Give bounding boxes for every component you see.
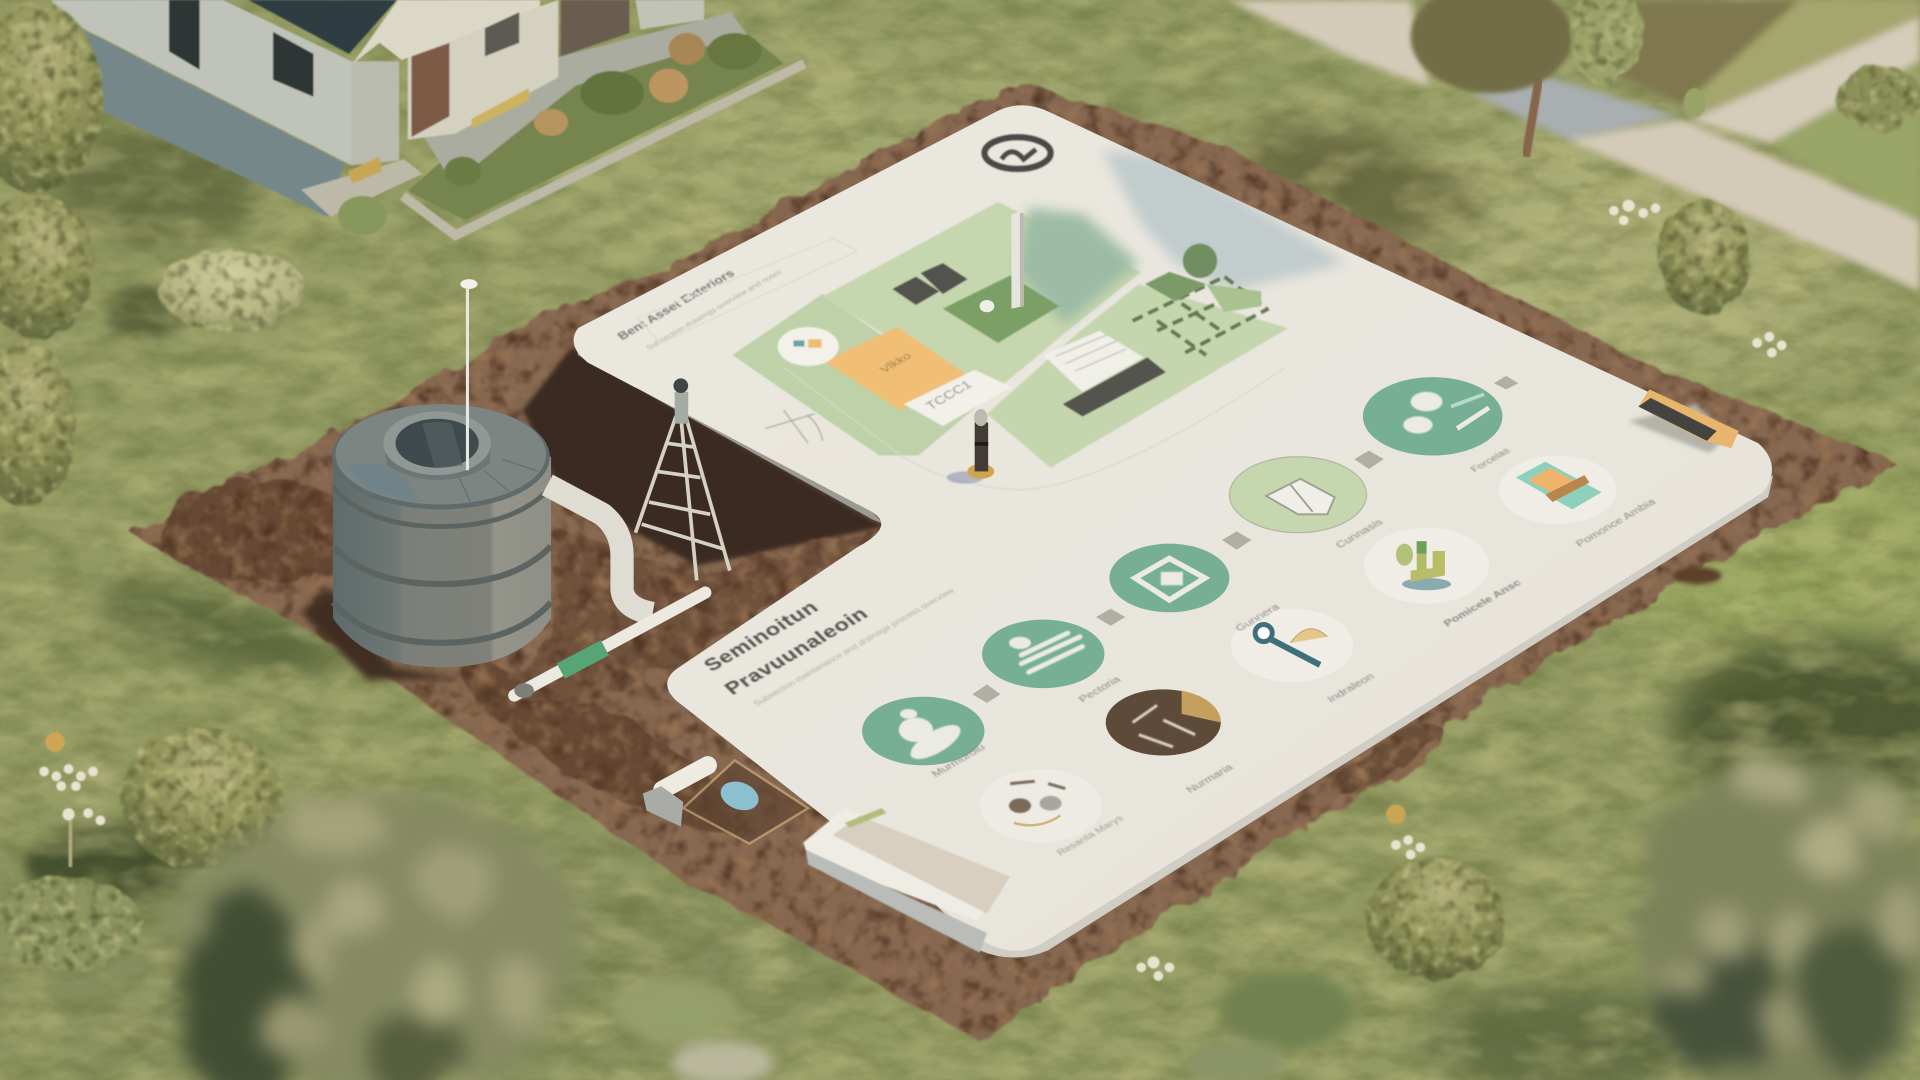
post: dark bollard marker	[947, 409, 994, 484]
tray: beige slab at lower board edge	[803, 808, 1011, 953]
step: circle 3: Gunnera	[1233, 602, 1283, 634]
step: circle 5: Forcelas	[1469, 446, 1513, 475]
soil mounds: dirt detail around tank	[159, 481, 1722, 858]
text block: left heading on upper wing: Subsection drawings overview and notes	[644, 268, 784, 352]
site plan: green map	[700, 202, 1739, 953]
shadow: tree shadow on board	[1102, 149, 1347, 291]
map: orange zone	[824, 327, 973, 410]
text block: board title: Pravuunaleoin	[720, 604, 873, 699]
post: white mast on map	[980, 211, 1024, 312]
bushes: blurred foreground bottom tufts	[615, 978, 1286, 1080]
map: white lined sheet	[1043, 331, 1144, 392]
part: white pipe and blue capsule	[643, 760, 808, 844]
bushes: blurred foreground right	[1635, 751, 1920, 1080]
pipe: white outflow elbow	[547, 485, 653, 613]
tube: green and white probe	[514, 593, 705, 698]
tower: lattice survey mast	[636, 378, 730, 580]
step: circle 4	[1229, 457, 1386, 551]
tank: grey cistern in the pit	[332, 279, 551, 667]
step: circle 2: Pectoria	[1077, 674, 1124, 705]
step: circle 5	[1363, 377, 1513, 475]
step: circle 2	[982, 620, 1124, 705]
map: green network diagram	[1133, 277, 1269, 355]
bushes: left column	[0, 2, 103, 506]
road: paved path upper right	[1227, 0, 1920, 291]
house: upper left	[51, 0, 804, 235]
step: circle 4: Cunnasis	[1334, 517, 1386, 551]
tank: neck opening	[383, 411, 491, 480]
step: lower icon 3 valve	[1231, 609, 1377, 705]
step: lower icon 5 layers	[1499, 456, 1659, 549]
step: circle 1	[862, 697, 988, 779]
map: dark pads	[893, 263, 967, 305]
step: circle 3	[1109, 544, 1283, 634]
connector: diamond 1	[972, 684, 1000, 703]
map: orange zone: Vlkko	[877, 350, 914, 375]
flowers: small white and yellow blooms	[39, 200, 1787, 981]
map: white table card	[904, 370, 1011, 426]
step: lower icon 4 green chart	[1364, 528, 1524, 629]
text block: left heading on upper wing	[615, 239, 857, 352]
icon: dark logo mark	[984, 137, 1051, 169]
map: dark bar	[1063, 358, 1166, 416]
trees: upper right	[1411, 0, 1920, 157]
map: white badge	[778, 327, 839, 366]
excavated pit: dark trench	[300, 347, 885, 704]
connector: diamond 5	[1494, 376, 1518, 389]
bushes: blurred foreground left	[178, 790, 582, 1080]
step: circle 1: Murmuroiu	[930, 742, 988, 779]
bushes: lawn shrubs	[0, 200, 1751, 1049]
step: lower icon 1 recycle: Resanta Marys	[1055, 814, 1126, 858]
map: miniature shrubs	[1145, 244, 1261, 312]
step: lower icon 2 brown disc: Nurmaria	[1184, 762, 1236, 795]
map: white table card: TCCC1	[923, 378, 975, 412]
text block: board title: Seminoitun	[700, 597, 823, 676]
text block: board title: Subsection maintenance and drainage process overview	[751, 586, 957, 708]
tank: vent antenna	[460, 279, 478, 470]
connector: diamond 4	[1354, 451, 1384, 469]
step: lower icon 2 brown disc	[1106, 689, 1236, 795]
connector: diamond 3	[1222, 531, 1251, 550]
step: lower icon 3 valve: Indraleon	[1325, 671, 1377, 705]
connector: diamond 2	[1096, 609, 1125, 626]
step: lower icon 4 green chart: Pomicele Ansc	[1442, 578, 1524, 629]
text block: small callout sketch at plan corner	[765, 367, 1286, 490]
tab: orange-black clip at board edge	[1629, 389, 1739, 453]
step: lower icon 1 recycle	[980, 769, 1126, 858]
step: lower icon 5 layers: Pomonce Ambia	[1574, 497, 1659, 549]
text block: left heading on upper wing: Bent Asset Exteriors	[615, 267, 737, 342]
